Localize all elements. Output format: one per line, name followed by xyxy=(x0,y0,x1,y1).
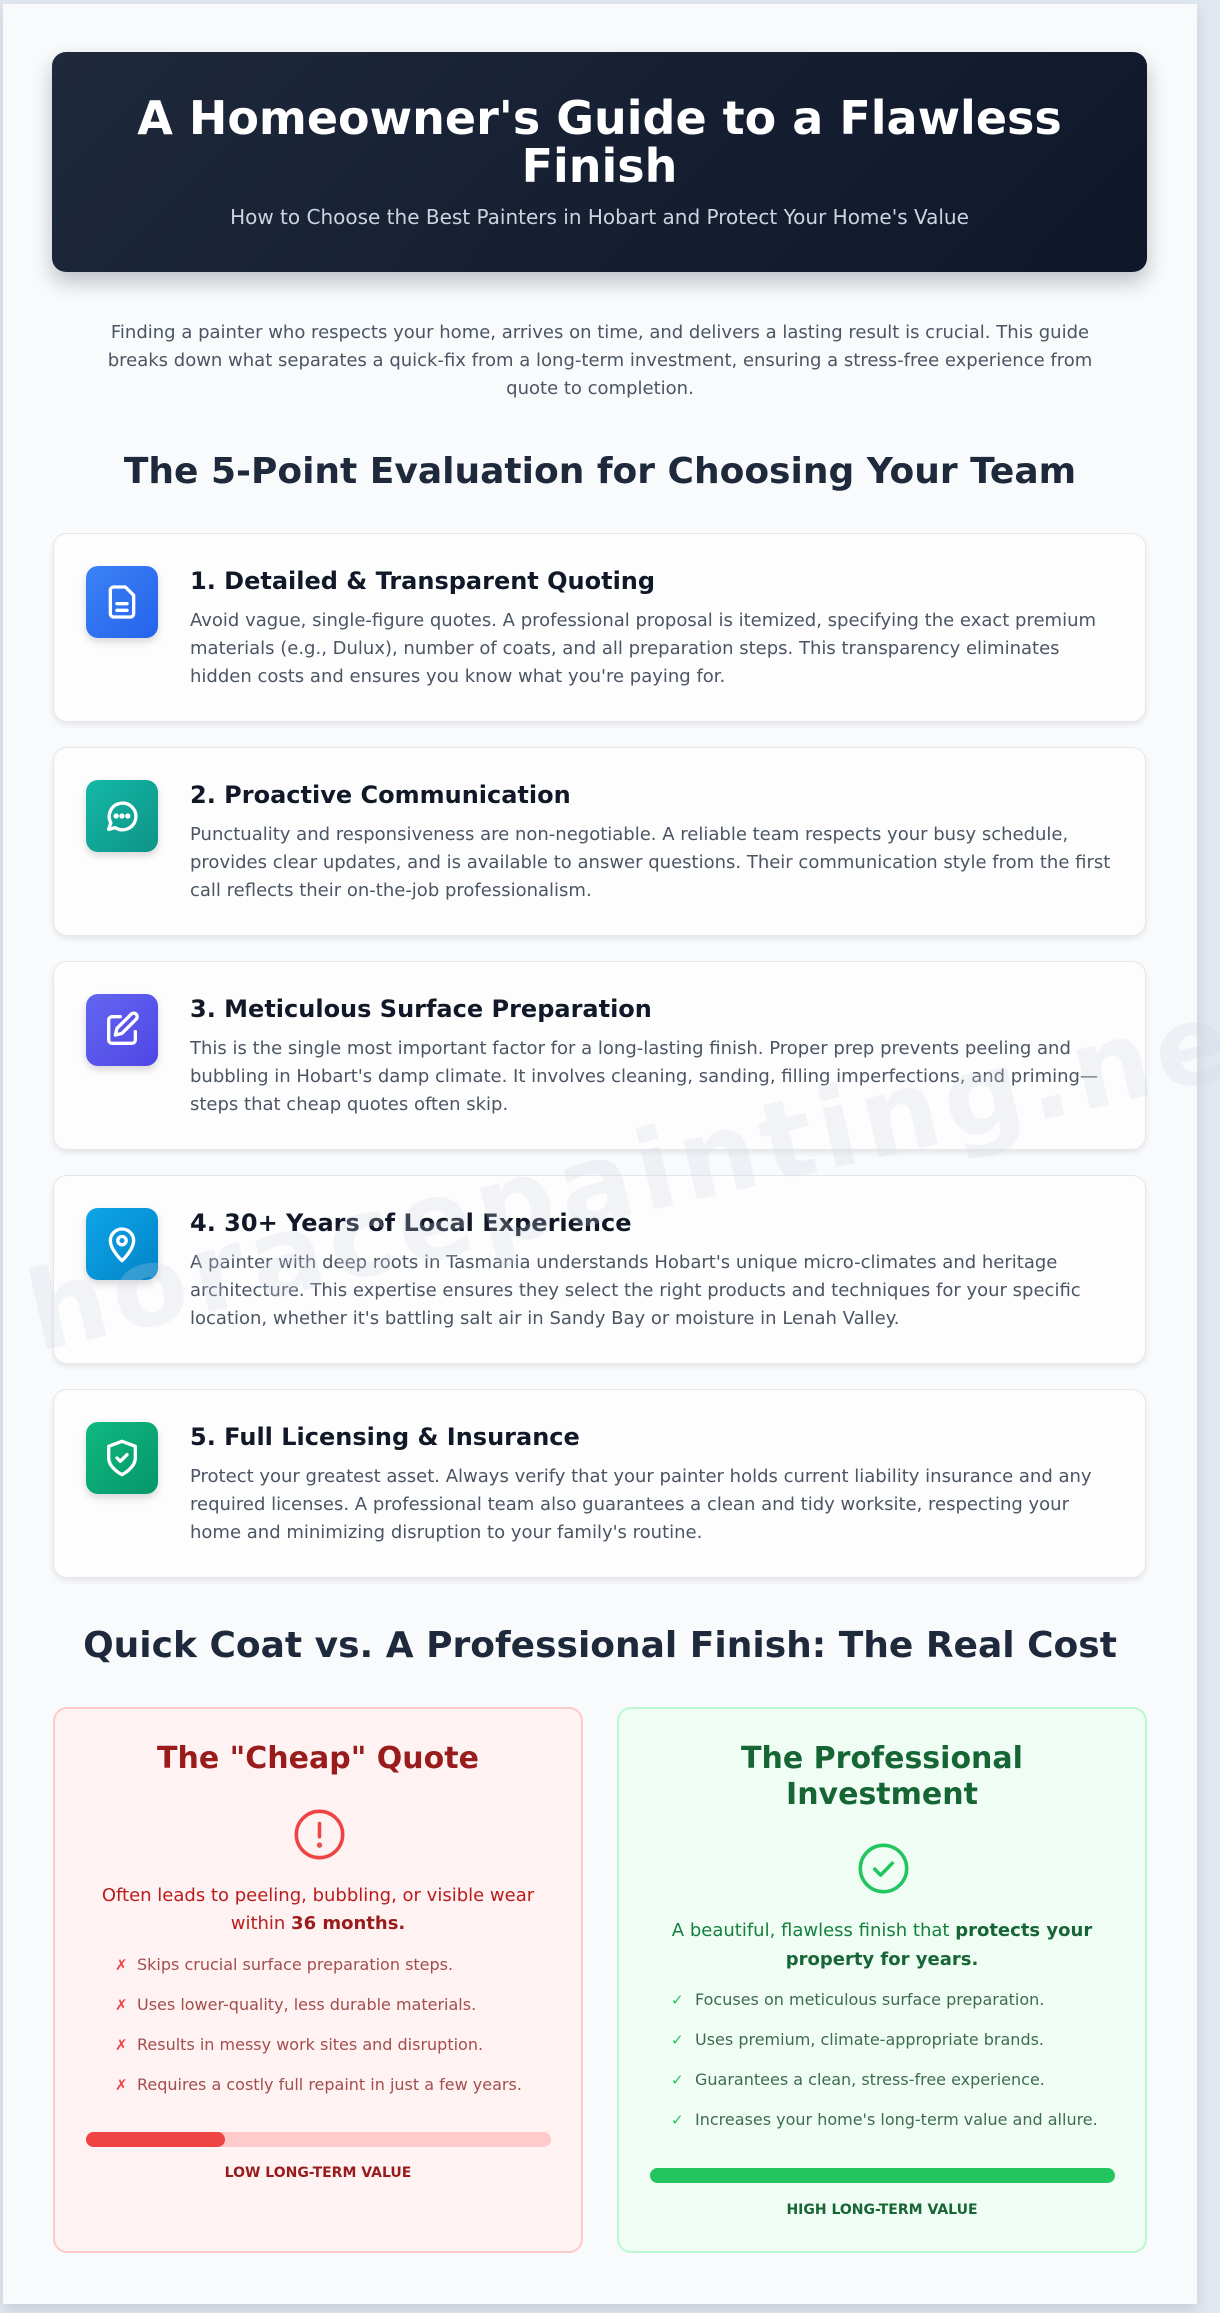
card text: Avoid vague, single-figure quotes. A professional proposal is itemized, specifying the exact premium materials (e.g., Dulux), number of coats, and all preparation steps. This transparency eliminates hidden costs and ensures you know what you're paying for. xyxy=(190,610,1096,687)
card 3 xyxy=(53,961,1146,1150)
icon: document xyxy=(86,566,158,638)
card text: Protect your greatest asset. Always verify that your painter holds current liability insurance and any required licenses. A professional team also guarantees a clean and tidy worksite, respecting your home and minimizing disruption to your family's routine. xyxy=(190,1466,1092,1543)
header banner xyxy=(52,52,1147,272)
heading: 5-point evaluation: The 5-Point Evaluation for Choosing Your Team xyxy=(124,451,1076,492)
label: LOW LONG-TERM VALUE xyxy=(225,2165,411,2181)
list: benefits: ✓ xyxy=(671,1991,684,2009)
list: downsides xyxy=(115,1955,522,2094)
list: benefits: Focuses on meticulous surface preparation. xyxy=(695,1990,1044,2009)
icon: location pin xyxy=(86,1208,158,1280)
list: benefits: Guarantees a clean, stress-free experience. xyxy=(695,2070,1045,2089)
card 5 xyxy=(53,1389,1146,1578)
card title: 3. Meticulous Surface Preparation xyxy=(190,995,652,1023)
card text: A painter with deep roots in Tasmania understands Hobart's unique micro-climates and heritage architecture. This expertise ensures they select the right products and techniques for your specific location, whether it's battling salt air in Sandy Bay or moisture in Lenah Valley. xyxy=(190,1252,1081,1329)
intro text: Finding a painter who respects your home, arrives on time, and delivers a lasting result is crucial. This guide breaks down what separates a quick-fix from a long-term investment, ensuring a stress-free experience from quote to completion. xyxy=(108,322,1092,399)
card 4 xyxy=(53,1175,1146,1364)
label: HIGH LONG-TERM VALUE xyxy=(786,2202,978,2218)
card title: 4. 30+ Years of Local Experience xyxy=(190,1209,632,1237)
icon: shield xyxy=(86,1422,158,1494)
value bar: high xyxy=(650,2168,1115,2183)
list: downsides: ✗ xyxy=(115,1956,128,1974)
icon: warning xyxy=(294,1810,344,1860)
list: benefits: ✓ xyxy=(671,2071,684,2089)
list: downsides: Uses lower-quality, less durable materials. xyxy=(137,1995,476,2014)
list: downsides: ✗ xyxy=(115,2076,128,2094)
list: benefits: ✓ xyxy=(671,2111,684,2129)
card 2 xyxy=(53,747,1146,936)
value bar: low xyxy=(86,2132,551,2147)
card text: This is the single most important factor for a long-lasting finish. Proper prep prevents peeling and bubbling in Hobart's damp climate. It involves cleaning, sanding, filling imperfections, and priming—steps that cheap quotes often skip. xyxy=(190,1038,1098,1115)
icon: check xyxy=(858,1844,908,1894)
icon: edit xyxy=(86,994,158,1066)
icon: chat xyxy=(86,780,158,852)
heading: comparison: Quick Coat vs. A Professional Finish: The Real Cost xyxy=(83,1625,1117,1666)
card title: 1. Detailed & Transparent Quoting xyxy=(190,567,655,595)
card text: Punctuality and responsiveness are non-negotiable. A reliable team respects your busy schedule, provides clear updates, and is available to answer questions. Their communication style from the first call reflects their on-the-job professionalism. xyxy=(190,824,1110,901)
card 1 xyxy=(53,533,1146,722)
description: A beautiful, flawless finish that protects your property for years. xyxy=(672,1920,1092,1970)
list: benefits xyxy=(671,1990,1098,2129)
list: downsides: ✗ xyxy=(115,2036,128,2054)
list: benefits: Increases your home's long-term value and allure. xyxy=(695,2110,1098,2129)
description: Often leads to peeling, bubbling, or visible wear within 36 months. xyxy=(102,1885,534,1934)
list: downsides: Results in messy work sites and disruption. xyxy=(137,2035,483,2054)
panel: cheap quote xyxy=(53,1707,583,2253)
subtitle: How to Choose the Best Painters in Hobart and Protect Your Home's Value xyxy=(230,205,969,229)
title: A Homeowner's Guide to a Flawless Finish xyxy=(137,91,1062,193)
list: downsides: Skips crucial surface preparation steps. xyxy=(137,1955,453,1974)
panel title: The Professional Investment xyxy=(741,1741,1023,1812)
list: benefits: ✓ xyxy=(671,2031,684,2049)
card title: 5. Full Licensing & Insurance xyxy=(190,1423,580,1451)
list: downsides: Requires a costly full repaint in just a few years. xyxy=(137,2075,522,2094)
panel title: The "Cheap" Quote xyxy=(157,1741,479,1776)
card title: 2. Proactive Communication xyxy=(190,781,571,809)
list: benefits: Uses premium, climate-appropriate brands. xyxy=(695,2030,1044,2049)
panel: professional investment xyxy=(617,1707,1147,2253)
list: downsides: ✗ xyxy=(115,1996,128,2014)
